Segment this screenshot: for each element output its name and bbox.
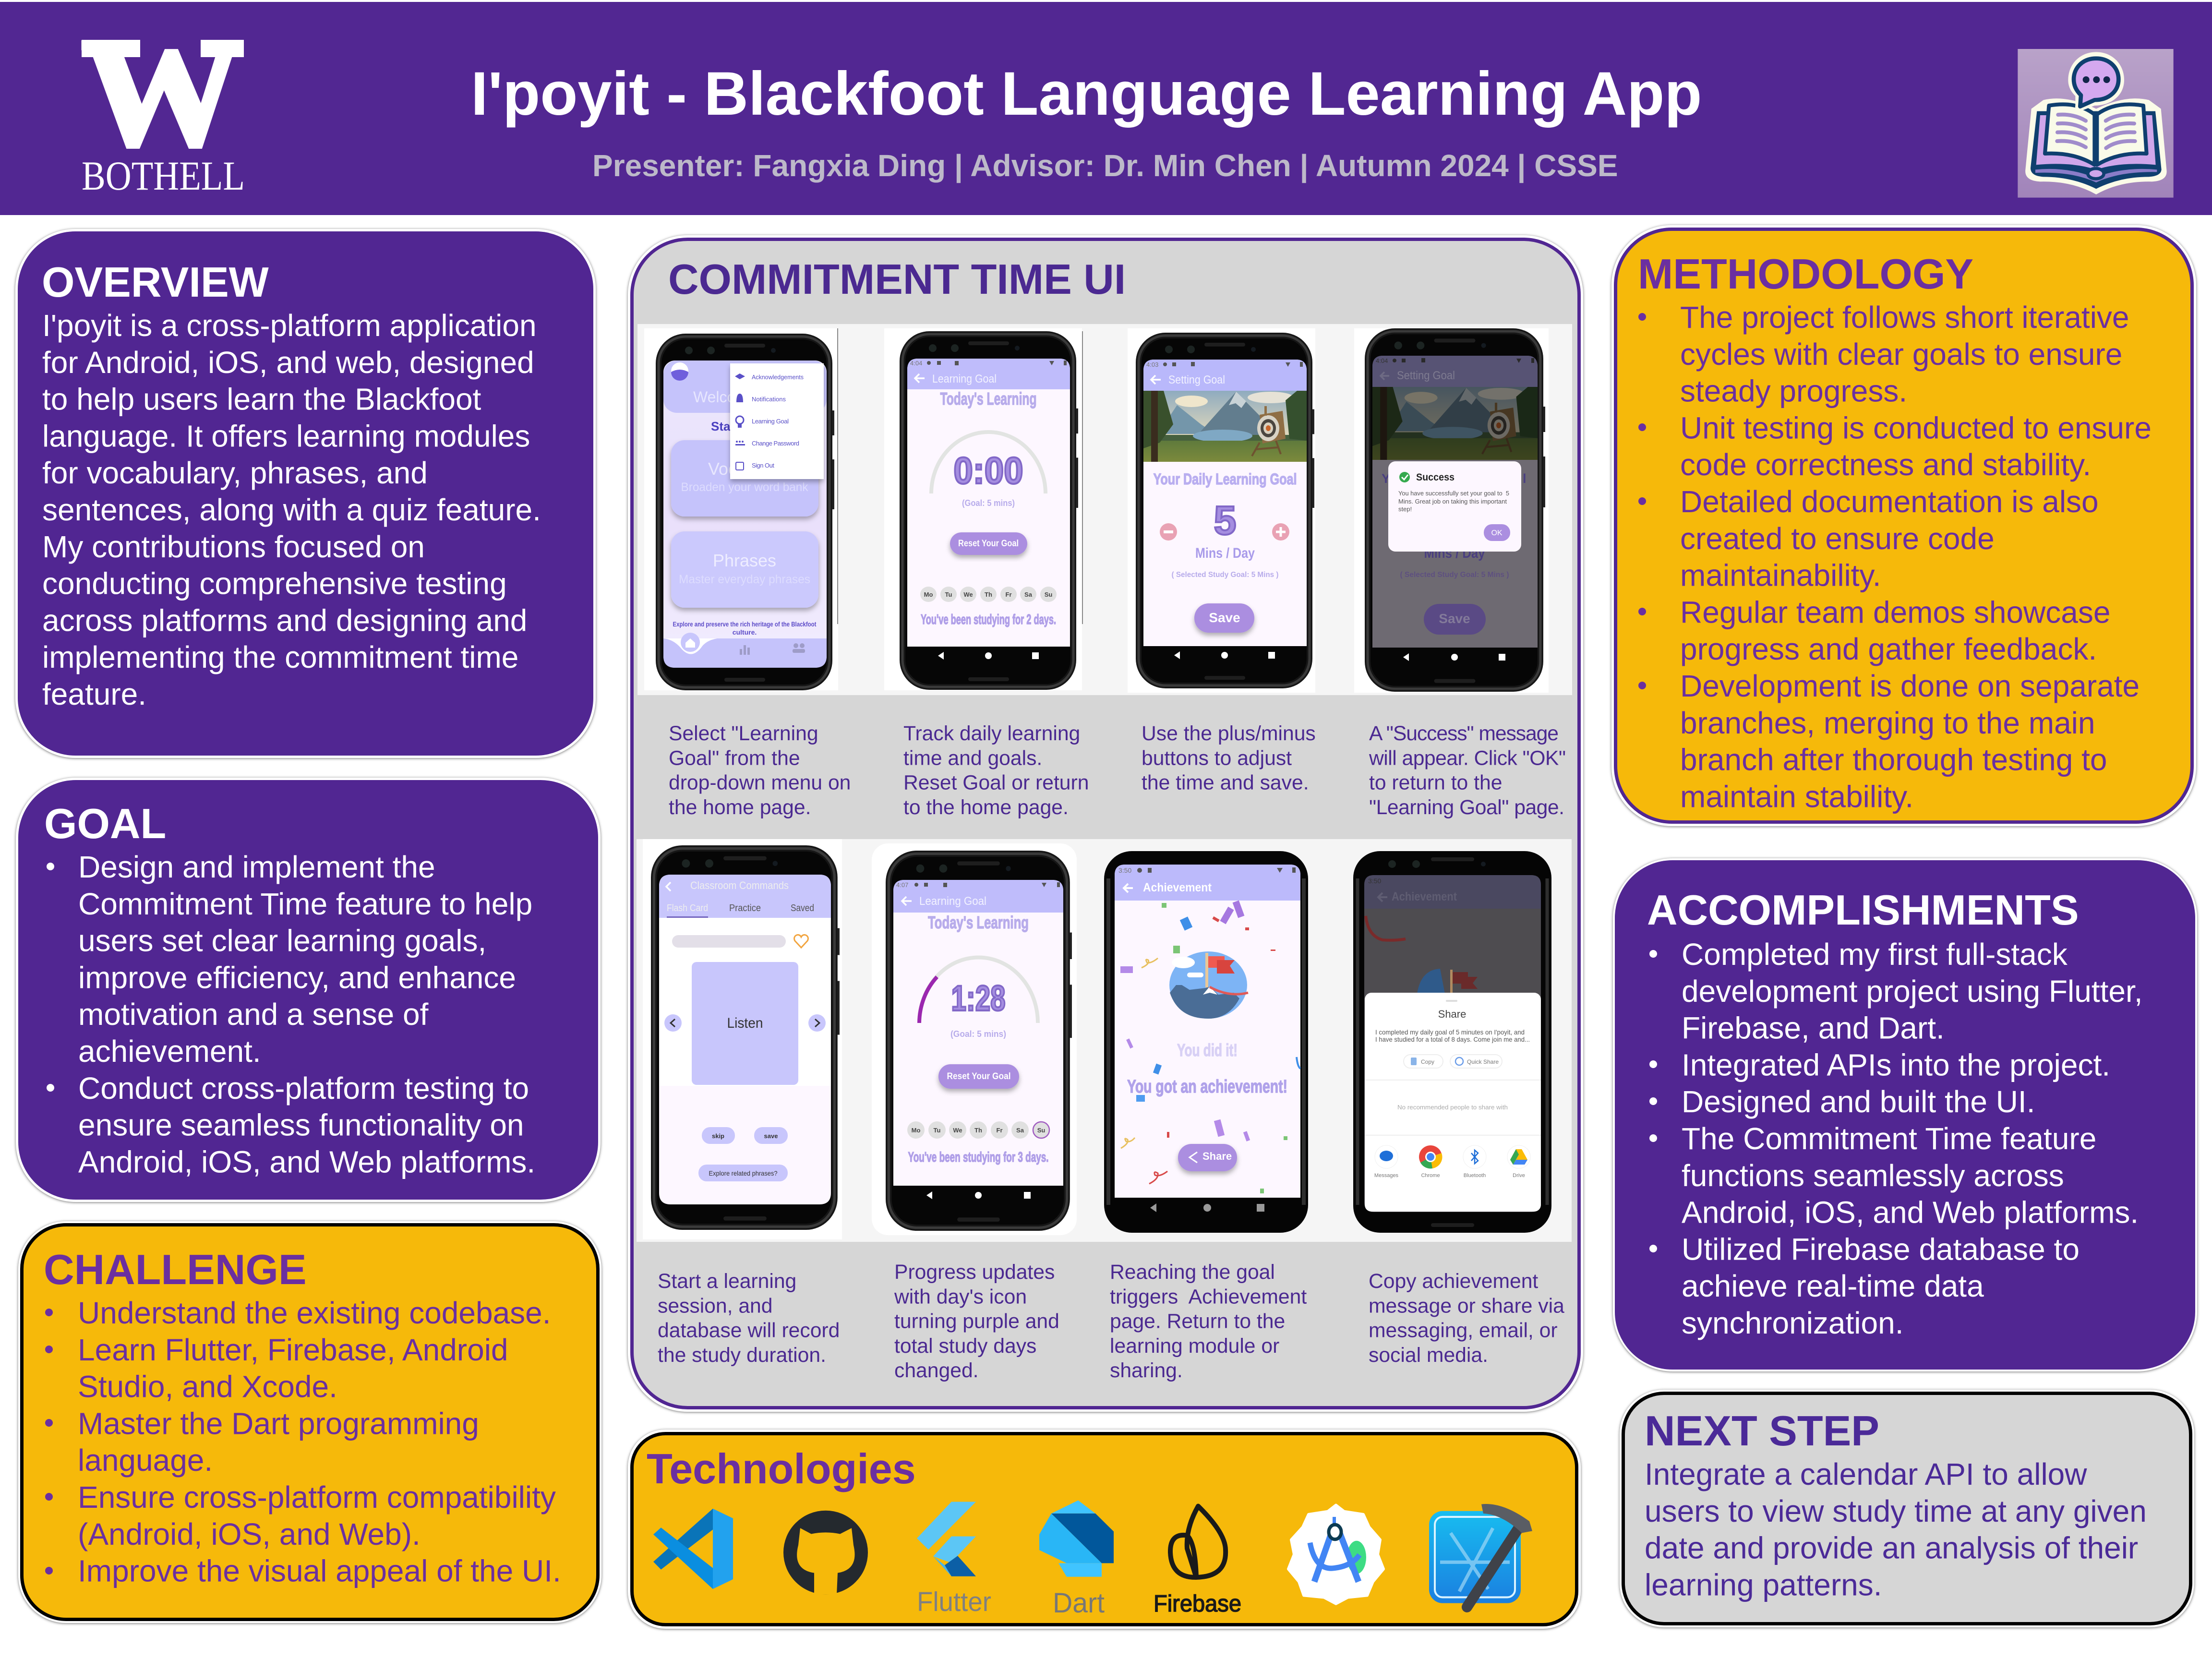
caption 6: total study days [894,1334,1036,1358]
text: accomplishments bullets [1649,937,2143,1340]
panel: accomplishments [1613,858,2197,1371]
phone 8: share sheet: I have studied for a total of 8 days. Come join me and... [1375,1035,1530,1043]
phone 1: home menu: Change Password [752,440,799,447]
phone 4: success dialog: Y [1382,471,1390,486]
text: accomplishments bullets: synchronization. [1682,1306,1903,1340]
phone 2: learning goal 0:00: (Goal: 5 mins) [962,498,1015,508]
heading: accomplishments: ACCOMPLISHMENTS [1647,886,2079,934]
logo: UW Bothell: W [82,6,243,178]
text: goal bullets: Conduct cross-platform testing to [78,1071,529,1106]
caption 7: learning module or [1110,1334,1279,1358]
phone 8: share sheet: Copy [1421,1058,1434,1065]
phone 7: achievement: Achievement [1143,881,1212,894]
icon: Dart [1039,1500,1114,1619]
caption 1: the home page. [669,796,811,819]
text: overview body: My contributions focused on [42,529,425,564]
text: overview body: to help users learn the Blackfoot [42,382,481,417]
phone 6: learning progress 1:28: Learning Goal [919,895,986,908]
text: overview body: across platforms and designing and [42,603,527,637]
text: overview body: for vocabulary, phrases, and [42,456,428,490]
icon: Xcode [1429,1504,1532,1607]
phone 4: success dialog: Mins / Day [1424,545,1485,561]
confetti [1120,901,1300,1193]
heading: methodology: METHODOLOGY [1638,250,1973,298]
phone 1: home menu [644,328,838,690]
phone 5: flash card: Practice [729,903,761,914]
phone 2: learning goal 0:00: Learning Goal [932,373,997,385]
text: methodology bullets: code correctness and stability. [1680,447,2091,482]
caption 4: to return to the [1369,771,1502,794]
icon: Firebase: Firebase [1154,1591,1241,1617]
text: methodology bullets: maintainability. [1680,558,1881,593]
phone 5: flash card [643,839,842,1239]
phone 6: learning progress 1:28: Mo [912,1127,920,1134]
text: accomplishments bullets: Firebase, and Dart. [1682,1011,1945,1046]
text: goal bullets: improve efficiency, and enhance [78,960,516,995]
icon: Dart: Dart [1053,1587,1105,1619]
text: challenge bullets: Ensure cross-platform compatibility [78,1480,556,1515]
text: accomplishments bullets: Android, iOS, and Web platforms. [1682,1195,2139,1230]
text: methodology bullets: maintain stability. [1680,779,1913,814]
panel: goal [16,778,601,1202]
phone 1: home menu: Welcome [693,388,757,406]
text: next step body: users to view study time at any given [1645,1494,2147,1528]
text: overview body: language. It offers learning modules [42,419,530,453]
text: accomplishments bullets: Completed my first full-stack [1682,937,2068,972]
logo: UW Bothell: BOTHELL [82,153,245,199]
phone 2: learning goal 0:00: Today's Learning [940,389,1037,409]
caption 6: changed. [894,1359,979,1382]
text: goal bullets: Design and implement the [78,850,435,884]
phone 6: learning progress 1:28 [872,843,1077,1235]
phone 1: home menu: Phrases [713,551,776,570]
caption 4 [1369,722,1566,819]
text: overview body: I'poyit is a cross-platform application [42,308,537,343]
panel: next step [1620,1390,2194,1627]
phone 4: success dialog: step! [1398,505,1412,513]
heading: next step: NEXT STEP [1645,1407,1879,1455]
phone 5: flash card: Explore related phrases? [709,1169,778,1177]
text: methodology bullets: cycles with clear goals to ensure [1680,337,2122,372]
subtitle: Presenter: Fangxia Ding | Advisor: Dr. Min Chen | Autumn 2024 | CSSE [592,148,1618,183]
phone 6: learning progress 1:28: Tu [934,1127,941,1134]
phone 7: achievement: You did it! [1177,1040,1238,1060]
caption 2: time and goals. [903,746,1042,769]
text: methodology bullets: progress and gather feedback. [1680,632,2097,666]
phone 6: learning progress 1:28: 1:28 [951,978,1005,1018]
caption 6: turning purple and [894,1310,1059,1333]
phone 1: home menu: Vocabulary [708,459,793,479]
text: methodology bullets: steady progress. [1680,374,1907,409]
phone 7: achievement: You got an achievement! [1127,1077,1287,1097]
phone 5: flash card: Listen [727,1015,763,1031]
text: methodology bullets: The project follows short iterative [1680,300,2129,335]
caption 7: page. Return to the [1110,1310,1285,1333]
phone 2: learning goal 0:00: You've been studying for 2 days. [921,612,1056,627]
text: overview body: implementing the commitment time [42,640,518,674]
phone 4: success dialog: You have successfully set your goal to 5 [1398,490,1509,497]
icon: Firebase [1154,1506,1241,1617]
phone 6: learning progress 1:28: Reset Your Goal [947,1071,1011,1082]
text: overview body: conducting comprehensive testing [42,566,507,601]
text: goal bullets: users set clear learning goals, [78,924,486,958]
phone 6: learning progress 1:28: (Goal: 5 mins) [950,1029,1006,1039]
text: goal bullets: motivation and a sense of [78,997,429,1032]
phone 6: learning progress 1:28: We [953,1127,962,1134]
phone 1: home menu: Master everyday phrases [679,573,810,586]
technology icons row [653,1500,1532,1619]
phone 3: setting goal: ( Selected Study Goal: 5 Mins ) [1171,571,1279,579]
caption 8: messaging, email, or [1369,1319,1558,1342]
phone 7: achievement: 3:50 [1118,866,1131,874]
phone 1: home menu: Start [711,419,740,433]
text: methodology bullets: Regular team demos showcase [1680,595,2110,629]
caption 5: Start a learning [658,1270,796,1293]
caption 2: Track daily learning [903,722,1080,745]
phone 2: learning goal 0:00: Fr [1005,591,1012,598]
text: challenge bullets: (Android, iOS, and Web). [78,1517,421,1551]
phone 2: learning goal 0:00: We [963,591,973,598]
caption 3: the time and save. [1142,771,1309,794]
phone 2: learning goal 0:00 [884,328,1083,690]
phone 8: share sheet: Messages [1374,1173,1399,1178]
phone 4: success dialog: Mins. Great job on taking this important [1398,498,1507,505]
text: overview body: feature. [42,677,146,711]
caption 8: Copy achievement [1369,1270,1538,1293]
phone 2: learning goal 0:00: Reset Your Goal [958,539,1019,549]
phone 6: learning progress 1:28: Today's Learning [928,913,1029,932]
text: methodology bullets [1638,300,2152,814]
icon: open book with speech bubble [2018,49,2174,198]
caption 8: message or share via [1369,1294,1564,1317]
icon: GitHub [783,1511,868,1594]
caption 7: sharing. [1110,1359,1183,1382]
phone 1: home menu: Learning Goal [752,418,789,425]
phone 4: success dialog: l [1523,471,1527,486]
phone 4: success dialog: Setting Goal [1397,369,1455,382]
phone 2: learning goal 0:00: 0:00 [953,449,1023,492]
text: accomplishments bullets: functions seamlessly across [1682,1158,2064,1193]
phone 1: home menu: Explore and preserve the rich heritage of the Blackfoot [673,620,817,628]
phone 1: home menu: Acknowledgements [752,373,804,381]
caption 4: will appear. Click "OK" [1369,746,1566,769]
phone 6: learning progress 1:28: Sa [1016,1127,1024,1134]
caption 5: session, and [658,1294,773,1317]
illustration: mountain flag [1169,951,1248,1019]
phone 2: learning goal 0:00: Th [985,591,992,598]
panel: commitment time UI [628,235,1583,1412]
text: overview body: sentences, along with a quiz feature. [42,493,541,527]
text: methodology bullets: branch after thorough testing to [1680,743,2107,777]
caption 1: Goal" from the [669,746,800,769]
phone 5: flash card: Flash Card [667,903,708,914]
title: I'poyit - Blackfoot Language Learning App [471,60,1702,128]
caption 3: buttons to adjust [1142,746,1292,769]
phone 2: learning goal 0:00: 4:04 [910,360,922,367]
icon: VS Code [653,1509,733,1589]
caption 2: to the home page. [903,796,1069,819]
header banner [0,2,2212,215]
phone 5: flash card: skip [712,1132,724,1140]
caption 6: with day's icon [894,1285,1027,1308]
phone 2: learning goal 0:00: Tu [945,591,952,598]
phone 6: learning progress 1:28: 4:07 [896,881,908,889]
phone 8: share sheet: Achievement [1392,890,1457,903]
text: goal bullets [47,850,535,1179]
phone 4: success dialog: OK [1491,529,1503,537]
phone 7: achievement [1104,851,1308,1233]
phone 8: share sheet: Drive [1513,1173,1525,1178]
panel: technologies [628,1430,1581,1629]
caption 2: Reset Goal or return [903,771,1089,794]
text: challenge bullets: Master the Dart programming [78,1406,479,1441]
text: challenge bullets: Understand the existing codebase. [78,1296,551,1330]
text: accomplishments bullets: Designed and built the UI. [1682,1084,2035,1119]
text: methodology bullets: Development is done on separate [1680,669,2140,703]
heading: overview: OVERVIEW [42,258,269,306]
caption 4: A "Success" message [1369,722,1559,745]
text: accomplishments bullets: achieve real-time data [1682,1269,1984,1303]
phone 6: learning progress 1:28: Su [1037,1127,1045,1134]
phone 3: setting goal: Setting Goal [1168,373,1225,386]
caption 7: Reaching the goal [1110,1261,1275,1284]
text: methodology bullets: branches, merging to the main [1680,706,2095,740]
text: goal bullets: Android, iOS, and Web platforms. [78,1144,535,1179]
caption 7: triggers Achievement [1110,1285,1307,1308]
text: accomplishments bullets: development project using Flutter, [1682,974,2143,1009]
phone 3: setting goal [1128,328,1315,693]
text: challenge bullets: language. [78,1443,213,1478]
phone 5: flash card: save [764,1132,778,1140]
panel: challenge [18,1221,601,1623]
phone 8: share sheet: 3:50 [1368,877,1381,885]
phone 3: setting goal: 5 [1214,498,1236,543]
phone 8: share sheet: No recommended people to share with [1397,1104,1508,1111]
icon: Android Studio [1288,1505,1383,1604]
phone 1: home menu: Notifications [752,396,786,403]
phone 3: setting goal: Save [1209,610,1240,625]
phone 8: share sheet: Share [1438,1008,1466,1020]
phone 8: share sheet: I completed my daily goal of 5 minutes on I'poyit, and [1375,1028,1525,1036]
text: accomplishments bullets: Utilized Firebase database to [1682,1232,2080,1266]
icon: Flutter [917,1502,991,1617]
text: challenge bullets: Learn Flutter, Firebase, Android [78,1333,508,1367]
phone 7: achievement: Share [1202,1150,1232,1162]
panel: overview [15,229,596,758]
text: next step body: Integrate a calendar API to allow [1645,1457,2087,1491]
text: overview body: for Android, iOS, and web, designed [42,345,534,380]
phone 8: share sheet [1353,851,1551,1233]
caption 1: drop-down menu on [669,771,851,794]
caption 5: database will record [658,1319,840,1342]
phone 3: setting goal: Mins / Day [1195,545,1255,561]
text: goal bullets: ensure seamless functionality on [78,1108,524,1142]
phone 4: success dialog: 4:04 [1376,357,1388,364]
phone 8: share sheet: Bluetooth [1464,1173,1486,1178]
text: next step body: learning patterns. [1645,1567,1882,1602]
heading: commitment time UI: COMMITMENT TIME UI [668,255,1126,303]
text: goal bullets: achievement. [78,1034,261,1069]
text: methodology bullets: Detailed documentation is also [1680,484,2099,519]
text: methodology bullets: Unit testing is conducted to ensure [1680,410,2152,445]
caption 5: the study duration. [658,1344,826,1367]
phone 1: home menu: Broaden your word bank [681,481,808,494]
heading: goal: GOAL [44,800,166,847]
text: accomplishments bullets: The Commitment Time feature [1682,1121,2096,1156]
phone 6: learning progress 1:28: Fr [997,1127,1002,1134]
phone 5: flash card: Classroom Commands [690,879,789,891]
phone 3: setting goal: 4:03 [1146,361,1158,368]
caption 8: social media. [1369,1344,1488,1367]
phone 1: home menu: Sign Out [752,462,774,469]
text: next step body: date and provide an analysis of their [1645,1531,2138,1565]
text: goal bullets: Commitment Time feature to help [78,887,532,921]
phone 5: flash card: Saved [791,903,814,914]
text: challenge bullets [45,1296,561,1588]
phone 4: success dialog: Save [1439,611,1470,626]
phone 2: learning goal 0:00: Su [1045,591,1052,598]
phone 2: learning goal 0:00: Mo [924,591,933,598]
panel: methodology [1611,225,2196,826]
phone 8: share sheet: Quick Share [1467,1058,1499,1065]
phone 4: success dialog [1354,328,1549,693]
caption 3: Use the plus/minus [1142,722,1316,745]
heading: challenge: CHALLENGE [44,1246,307,1293]
caption 6: Progress updates [894,1261,1055,1284]
phone 4: success dialog: ( Selected Study Goal: 5 Mins ) [1400,571,1509,579]
text: accomplishments bullets: Integrated APIs into the project. [1682,1047,2110,1082]
phone 3: setting goal: Your Daily Learning Goal [1153,470,1297,488]
text: methodology bullets: created to ensure code [1680,521,1995,556]
heading: technologies: Technologies [647,1445,916,1492]
caption 4: "Learning Goal" page. [1369,796,1564,819]
phone 6: learning progress 1:28: You've been studying for 3 days. [908,1150,1048,1165]
phone 8: share sheet: Chrome [1421,1173,1440,1178]
caption 1: Select "Learning [669,722,818,745]
phone 6: learning progress 1:28: Th [974,1127,982,1134]
phone 1: home menu: culture. [733,628,757,636]
icon: Flutter: Flutter [917,1586,991,1617]
phone 2: learning goal 0:00: Sa [1024,591,1033,598]
text: challenge bullets: Improve the visual appeal of the UI. [78,1554,561,1588]
phone 4: success dialog: Success [1416,472,1455,483]
text: challenge bullets: Studio, and Xcode. [78,1370,337,1404]
